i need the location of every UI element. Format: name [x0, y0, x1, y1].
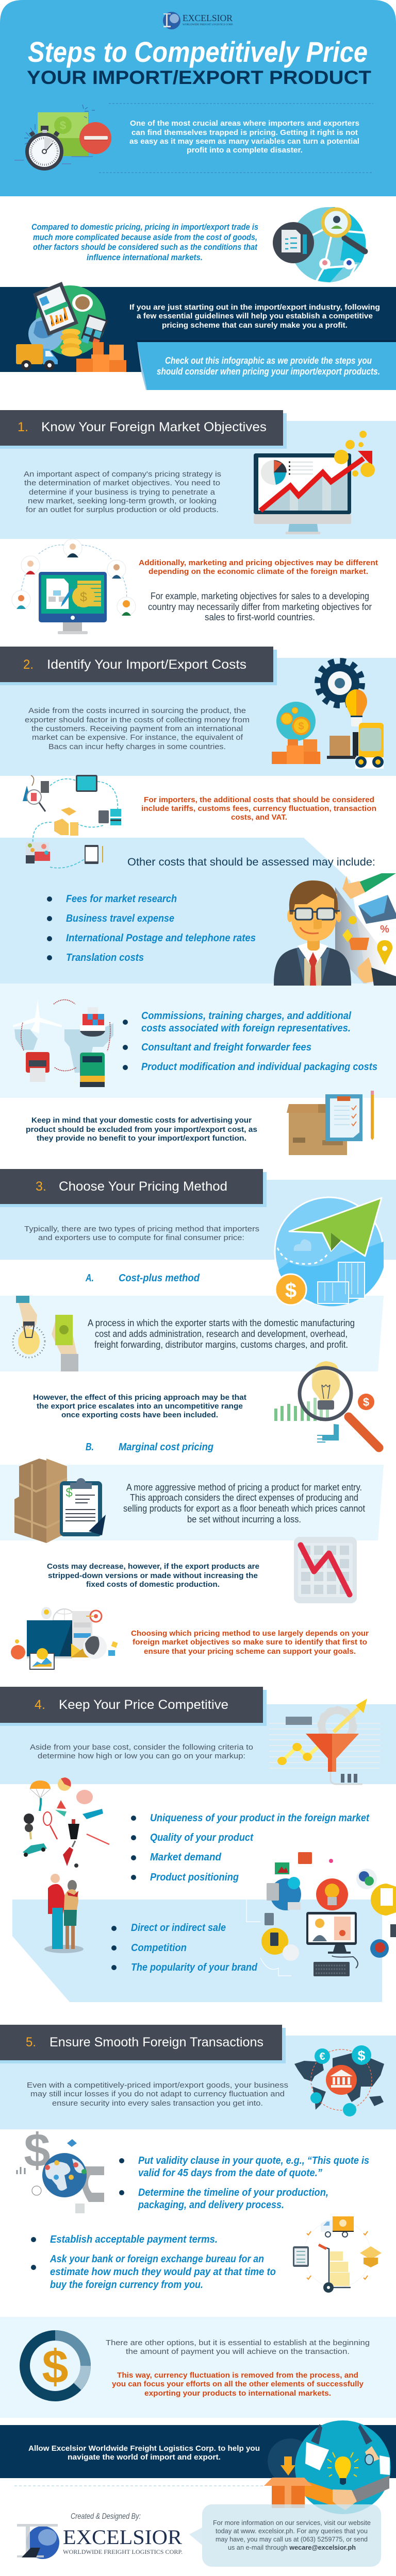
text: two types: Typically, there are two types of pricing method that importers: [24, 1225, 259, 1233]
text: currency fluctuation: ensure security into every sales transaction you get into.: [52, 2099, 263, 2108]
list: quote and timeline: Determine the timeline of your production,: [138, 2187, 328, 2198]
panel: section 2: [0, 647, 396, 776]
text: importer costs highlight: [141, 795, 376, 822]
text: getting started: If you are just starting out in the import/export industry, following: [129, 303, 380, 312]
text: marginal description: [123, 1482, 365, 1524]
text: market objectives: determine if your business is trying to penetrate a: [29, 488, 216, 497]
icon: tablet, globe, truck and boxes: [16, 282, 126, 372]
icon: world map with currencies and bank: [294, 2045, 384, 2116]
icon: money and stopwatch: [14, 105, 111, 171]
callout: contact information: [189, 2504, 381, 2567]
list: quote and timeline: [119, 2155, 369, 2211]
text: importer costs highlight: For importers, the additional costs that should be considered: [144, 795, 374, 804]
text: hero intro: profit into a complete disaster.: [187, 146, 303, 155]
text: marginal description: be set without incurring a loss.: [187, 1514, 301, 1524]
panel: marginal cost pricing: [0, 1459, 384, 1543]
icon: businessman: [274, 873, 396, 986]
list: quote and timeline: Put validity clause in your quote, e.g., “This quote is: [138, 2155, 369, 2166]
panel: call to action band: [0, 2425, 396, 2478]
list: sale factors: The popularity of your brand: [131, 1962, 258, 1973]
text: collecting money: Bacs can incur hefty charges in some countries.: [48, 742, 226, 751]
text: markup criteria: determine how high or low you can go on your markup:: [38, 1752, 245, 1760]
title: [27, 36, 371, 88]
subheading: method B: [86, 1442, 213, 1453]
panel: other costs: [0, 838, 396, 984]
text: domestic costs note: Keep in mind that your domestic costs for advertising your: [31, 1116, 252, 1125]
heading: section 4: Keep Your Price Competitive: [59, 1698, 228, 1712]
text: stripped-down versions note: fixed costs of domestic production.: [86, 1580, 220, 1589]
icon: dollar donut: [25, 2335, 86, 2396]
text: hero intro: as easy as it may seem as many variables can turn a potential: [129, 137, 359, 146]
icon: magnifier with bulb: $: [363, 1396, 369, 1409]
text: call to action: [28, 2444, 260, 2462]
list: price criteria: Product positioning: [150, 1872, 239, 1883]
text: domestic pricing comparison: much more complicated because aside from the cost of goods,: [33, 232, 257, 242]
text: collecting money: [25, 706, 250, 751]
icon: long shadow: [335, 887, 396, 984]
list: additional costs: Product modification and individual packaging costs: [141, 1061, 377, 1073]
heading: section 3: Choose Your Pricing Method: [59, 1179, 227, 1194]
list: sale factors: [111, 1922, 258, 1973]
icon: currency globe: [17, 2124, 104, 2213]
text: collecting money: exporter should factor in the costs of collecting money from: [25, 716, 250, 724]
text: cost-plus description: [88, 1318, 355, 1350]
icon: monitor with rising arrow: [254, 431, 375, 534]
text: fluctuation removed highlight: [112, 2371, 364, 2398]
logo: Excelsior top: WORLDWIDE FREIGHT LOGISTICS CORP.: [183, 24, 233, 26]
text: market objectives: for an outlet for surplus production or old products.: [26, 505, 219, 514]
list: price criteria: Market demand: [150, 1852, 222, 1863]
text: call to action: Allow Excelsior Worldwide Freight Logistics Corp. to help you: [28, 2444, 260, 2453]
text: domestic costs note: they provide no benefit to your import/export function.: [37, 1134, 246, 1143]
list: additional costs: costs associated with foreign representatives.: [141, 1023, 351, 1034]
text: collecting money: market can be expensive. For instance, the equivalent of: [32, 733, 243, 742]
subheading: method B: B.: [86, 1442, 94, 1453]
list: sale factors: Competition: [131, 1942, 187, 1954]
heading: section 5: Ensure Smooth Foreign Transactions: [50, 2035, 263, 2049]
text: market objectives: An important aspect of company's pricing strategy is: [24, 470, 221, 479]
icon: dollar donut: $: [42, 2341, 69, 2393]
text: other options: [106, 2338, 370, 2356]
list: other costs: International Postage and telephone rates: [66, 933, 256, 944]
icon: couple: [44, 1874, 84, 1953]
text: contact details: today at www. excelsior.ph. For any queries that you: [216, 2527, 368, 2535]
icon: world map with currencies and bank: €: [319, 2051, 325, 2062]
text: uncompetitive range note: However, the effect of this pricing approach may be that: [33, 1393, 246, 1402]
icon: funnel chart: [269, 1699, 380, 1784]
text: call to action: navigate the world of import and export.: [68, 2453, 221, 2462]
text: uncompetitive range note: [33, 1393, 246, 1419]
list: price criteria: [131, 1812, 370, 1883]
text: two types: [24, 1225, 259, 1242]
text: contact details: us an e-mail through wecare@excelsior.ph: [228, 2544, 356, 2551]
text: currency fluctuation: [27, 2081, 288, 2108]
text: economic climate highlight: Additionally, marketing and pricing objectives may be different: [139, 558, 378, 567]
text: getting started: a few essential guidelines will help you establish a competitive: [137, 312, 373, 320]
list: other costs: [47, 893, 256, 963]
heading: section 5: 5.: [26, 2035, 36, 2049]
text: cost-plus description: cost and adds administration, research and development, overhead,: [95, 1329, 348, 1339]
text: stripped-down versions note: stripped-down versions or made without increasing the: [48, 1571, 258, 1580]
list: other costs: Business travel expense: [66, 913, 174, 924]
heading: section 3: 3.: [36, 1179, 46, 1194]
logo: Excelsior footer: WORLDWIDE FREIGHT LOGISTICS CORP.: [63, 2548, 183, 2555]
icon: monitor with customer network: $: [80, 590, 87, 604]
icon: magnifier with bulb: [274, 1361, 379, 1448]
subheading: method A: A.: [85, 1273, 94, 1284]
list: other costs: Translation costs: [66, 952, 144, 963]
text: market objectives: the determination of market objectives. You need to: [24, 479, 220, 487]
panel: section 5: [0, 2025, 396, 2129]
text: fluctuation removed highlight: exporting your products to international markets.: [144, 2389, 331, 2398]
list: payment terms: [31, 2234, 276, 2291]
panel: section 1: [0, 410, 396, 539]
text: developing country example: country may necessarily differ from marketing objectives for: [148, 602, 372, 612]
text: importer costs highlight: costs, and VAT.: [231, 813, 287, 822]
text: other options: There are other options, but it is essential to establish at the beginning: [106, 2338, 370, 2347]
icon: route from shop to delivery: [23, 775, 121, 868]
text: pricing method highlight: Choosing which pricing method to use largely depends on your: [131, 1629, 369, 1638]
text: fluctuation removed highlight: This way, currency fluctuation is removed from the process, and: [117, 2371, 358, 2380]
panel: options and payment: [0, 2317, 396, 2418]
text: contact details: For more information on our services, visit our website: [213, 2519, 371, 2527]
icon: technology cluster: [246, 1852, 396, 1976]
logo: Excelsior footer: [17, 2524, 183, 2559]
list: additional costs: Commissions, training charges, and additional: [141, 1010, 351, 1022]
logo: Excelsior footer: EXCELSIOR: [63, 2526, 182, 2549]
icon: delivery checklist: [293, 2216, 382, 2293]
text: two types: and exporters use to compute for final consumer price:: [38, 1233, 244, 1242]
icon: lifestyle products: [23, 1777, 109, 1868]
text: cost-plus description: freight forwarding, distributor margins, customs charges, and profit.: [94, 1340, 348, 1350]
credit: created by: Created & Designed By:: [71, 2512, 141, 2521]
panel: hero: [0, 0, 396, 196]
text: stripped-down versions note: [47, 1562, 259, 1589]
text: other options: the amount of payment you will achieve on the transaction.: [126, 2347, 350, 2356]
icon: freight modes map: [13, 999, 113, 1087]
text: hero intro: can find themselves trapped is pricing. Getting it right is not: [131, 128, 358, 137]
text: marginal description: selling products for export as a floor beneath which prices cannot: [123, 1503, 365, 1514]
icon: gear, coins, boxes and forklift: $: [298, 721, 304, 732]
text: contact details: may have, you may call us at (063) 5259775, or send: [216, 2535, 368, 2543]
text: pricing method highlight: foreign market objectives so make sure to identify that first to: [133, 1638, 367, 1647]
text: economic climate highlight: depending on the economic climate of the foreign market.: [148, 567, 368, 576]
list: payment terms: Ask your bank or foreign exchange bureau for an: [50, 2253, 264, 2265]
logo: Excelsior top: EXCELSIOR: [183, 13, 233, 23]
text: currency fluctuation: Even with a competitively-priced import/export goods, your business: [27, 2081, 288, 2090]
icon: paper plane in circle: [275, 1197, 384, 1306]
text: domestic pricing comparison: [31, 222, 258, 262]
text: developing country example: sales to first-world countries.: [205, 612, 315, 622]
text: markup criteria: Aside from your base cost, consider the following criteria to: [30, 1743, 253, 1752]
icon: boxes and signed clipboard: $: [65, 1486, 73, 1500]
icon: paper plane in circle: $: [285, 1279, 296, 1302]
panel: direct sale and competition: [12, 1852, 396, 2002]
list: other costs: Fees for market research: [66, 893, 177, 905]
text: economic climate highlight: [139, 558, 378, 576]
text: cost-plus description: A process in which the exporter starts with the domestic manufacturing: [88, 1318, 355, 1328]
heading: section 5: [0, 2025, 286, 2063]
text: uncompetitive range note: once exporting costs have been included.: [61, 1411, 218, 1419]
icon: handshake, bulb and box: [264, 2420, 391, 2514]
heading: other costs: Other costs that should be assessed may include:: [127, 856, 375, 868]
list: additional costs: Consultant and freight forwarder fees: [141, 1042, 311, 1053]
text: marginal description: A more aggressive method of pricing a product for market entry.: [126, 1482, 362, 1493]
text: domestic costs note: [26, 1116, 257, 1143]
icon: globe search: [273, 207, 366, 282]
heading: section 4: 4.: [35, 1698, 45, 1712]
list: additional costs: [123, 1010, 377, 1073]
text: hero intro: One of the most crucial areas where importers and exporters: [130, 119, 359, 128]
list: payment terms: Establish acceptable payment terms.: [50, 2234, 218, 2245]
panel: cost-plus method: [0, 1296, 384, 1371]
list: quote and timeline: packaging, and delivery process.: [138, 2199, 284, 2211]
icon: hands with bulb and money: [13, 1296, 78, 1371]
list: quote and timeline: valid for 45 days from the date of quote.”: [138, 2167, 322, 2179]
icon: laptop strategy collage: [11, 1607, 118, 1669]
text: currency fluctuation: may still incur losses if you do not adapt to currency fluctuation and: [30, 2090, 285, 2098]
text: uncompetitive range note: the export price escalates into an uncompetitive range: [37, 1402, 243, 1411]
logo: Excelsior top: [163, 12, 233, 29]
text: market objectives: new market, seeking long-term growth, or looking: [28, 497, 217, 505]
callout: check out this infographic: [135, 340, 396, 390]
icon: gear, coins, boxes and forklift: [272, 662, 384, 769]
list: sale factors: Direct or indirect sale: [131, 1922, 226, 1934]
icon: money and stopwatch: $: [60, 119, 66, 132]
list: payment terms: estimate how much they would pay at that time to: [50, 2266, 276, 2278]
text: developing country example: [148, 591, 372, 622]
text: markup criteria: [30, 1743, 253, 1760]
icon: world map with currencies and bank: $: [357, 2048, 366, 2063]
icon: currency globe: $: [24, 2124, 51, 2177]
icon: monitor with customer network: [12, 539, 136, 634]
text: domestic costs note: product should be excluded from your import/export cost, as: [26, 1125, 257, 1134]
heading: section 4: [0, 1687, 267, 1726]
text: marginal description: This approach considers the direct expenses of producing and: [130, 1493, 358, 1503]
subheading: method A: Cost-plus method: [119, 1273, 200, 1284]
text: domestic pricing comparison: Compared to domestic pricing, pricing in import/export trade is: [31, 222, 258, 232]
text: hero intro: [129, 119, 359, 155]
list: payment terms: buy the foreign currency from you.: [50, 2279, 203, 2291]
text: importer costs highlight: include tariffs, customs fees, currency fluctuation, transaction: [141, 804, 376, 813]
text: getting started: [129, 303, 380, 330]
panel: getting started band: [0, 282, 396, 372]
heading: section 1: Know Your Foreign Market Objectives: [41, 420, 267, 434]
list: price criteria: Uniqueness of your product in the foreign market: [150, 1812, 370, 1824]
text: developing country example: For example, marketing objectives for sales to a developing: [151, 591, 369, 601]
text: domestic pricing comparison: other factors should be considered such as the conditions that: [33, 242, 258, 252]
text: stripped-down versions note: Costs may decrease, however, if the export products are: [47, 1562, 259, 1571]
subheading: method B: Marginal cost pricing: [119, 1442, 213, 1453]
text: getting started: pricing scheme that can surely make you a profit.: [162, 321, 348, 330]
list: price criteria: Quality of your product: [150, 1832, 254, 1843]
text: pricing method highlight: [131, 1629, 369, 1656]
text: pricing method highlight: ensure that your pricing scheme can support your goals.: [144, 1647, 356, 1656]
panel: section 3: [0, 1169, 396, 1260]
heading: section 1: 1.: [18, 420, 28, 434]
icon: businessman: %: [380, 924, 389, 935]
heading: section 2: 2.: [23, 657, 34, 672]
title: YOUR IMPORT/EXPORT PRODUCT: [27, 67, 371, 88]
text: domestic pricing comparison: influence international markets.: [87, 252, 203, 262]
panel: additional costs: [0, 984, 396, 1098]
panel: section 4: [0, 1687, 396, 1784]
icon: boxes and signed clipboard: [14, 1459, 106, 1543]
text: market objectives: [24, 470, 221, 514]
heading: section 2: Identify Your Import/Export Costs: [47, 657, 246, 672]
text: fluctuation removed highlight: you can focus your efforts on all the other elements of successfully: [112, 2380, 364, 2388]
heading: section 2: [0, 647, 277, 685]
text: collecting money: Aside from the costs incurred in sourcing the product, the: [28, 706, 246, 715]
subheading: method A: [85, 1273, 200, 1284]
icon: cardboard box and checklist: [287, 1091, 374, 1155]
text: collecting money: the customers. Receiving payment from an international: [31, 724, 243, 733]
heading: section 1: [0, 410, 287, 449]
heading: section 3: [0, 1169, 267, 1207]
icon: declining chart: [294, 1537, 357, 1603]
text: contact details: [213, 2519, 371, 2551]
